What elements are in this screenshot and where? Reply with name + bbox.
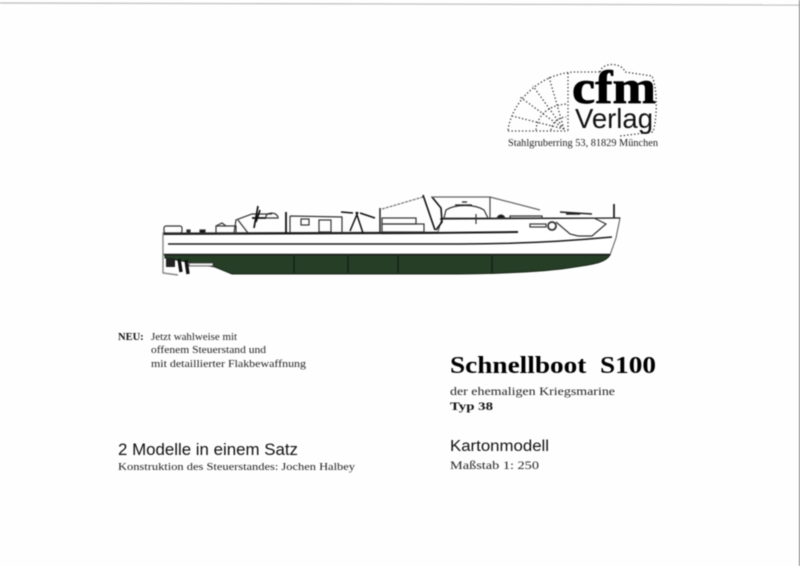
title: Schnellboot S100 <box>450 353 656 379</box>
logo word: Verlag: Verlag <box>575 103 653 134</box>
note: NEU <box>118 332 307 370</box>
credit line: Konstruktion des Steuerstandes: Jochen Halbey <box>118 461 356 473</box>
hull stripe and deck lines <box>163 218 620 275</box>
scale: Maßstab 1: 250 <box>450 458 539 472</box>
product type: Kartonmodell <box>450 438 549 455</box>
ship side elevation <box>163 195 620 275</box>
subtitle: der ehemaligen Kriegsmarine <box>450 384 615 398</box>
ship hull white topsides <box>163 218 620 255</box>
note label: NEU: <box>118 332 144 343</box>
subheading: 2 Modelle in einem Satz <box>118 441 298 459</box>
icon: dotted ship-curve fan <box>508 64 656 136</box>
title block <box>450 353 656 472</box>
type label: Typ 38 <box>450 399 493 413</box>
text block: two models <box>118 441 356 473</box>
publisher address: Stahlgruberring 53, 81829 München <box>508 138 658 149</box>
note body: Jetzt wahlweise mit <box>151 332 237 343</box>
logo word: cfm: cfm <box>572 62 656 114</box>
ship green underwater hull <box>165 255 610 274</box>
propellers and rudder <box>166 258 213 274</box>
note body <box>151 332 307 370</box>
note body: mit detaillierter Flakbewaffnung <box>151 359 307 370</box>
note body: offenem Steuerstand und <box>151 345 267 356</box>
aft deck equipment and guns <box>164 195 614 236</box>
logo: cfm Verlag <box>508 62 658 149</box>
